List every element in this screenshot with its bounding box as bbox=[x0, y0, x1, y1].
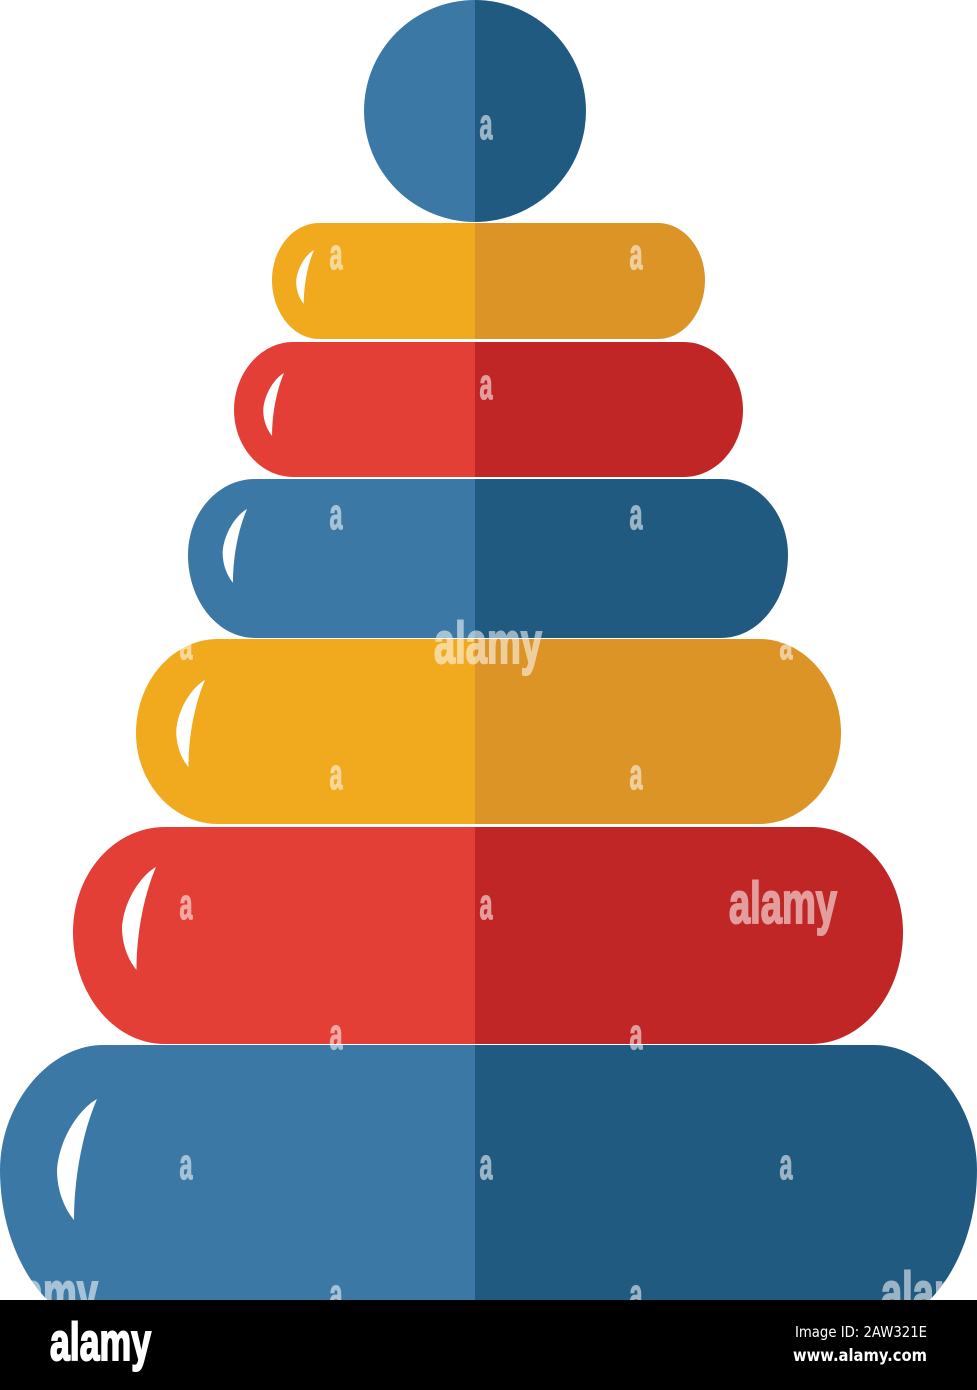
watermark letters: a bbox=[630, 230, 643, 279]
watermark letters: a bbox=[630, 490, 643, 539]
watermark letters: a bbox=[480, 880, 493, 929]
ring 4: yellow bbox=[136, 639, 841, 824]
watermark letters: a bbox=[330, 750, 343, 799]
watermark letters: a bbox=[180, 1140, 193, 1189]
watermark letters: a bbox=[180, 880, 193, 929]
watermark letters: a bbox=[630, 1010, 643, 1059]
watermark letters: a bbox=[630, 1270, 643, 1319]
watermark letters: a bbox=[180, 620, 193, 669]
watermark logos: alamy bbox=[434, 611, 542, 676]
ring 1: small yellow bbox=[272, 223, 705, 339]
ring 5: red bbox=[73, 827, 903, 1044]
base ring: large blue bbox=[0, 1045, 977, 1326]
watermark letters: a bbox=[330, 1010, 343, 1059]
ring 3: blue bbox=[188, 479, 788, 638]
watermark letters: a bbox=[330, 490, 343, 539]
watermark letters: a bbox=[480, 1140, 493, 1189]
watermark letters: a bbox=[630, 750, 643, 799]
watermark letters: a bbox=[780, 1140, 793, 1189]
footer logo: alamy bbox=[50, 1313, 151, 1372]
ball on top bbox=[364, 0, 586, 222]
image id: Image ID: 2AW321E bbox=[795, 1323, 927, 1341]
watermark letters: a bbox=[330, 1270, 343, 1319]
footer bar bbox=[0, 1300, 977, 1390]
watermark logos bbox=[0, 611, 977, 1326]
website: www.alamy.com bbox=[793, 1346, 927, 1365]
watermark logos: alamy bbox=[729, 871, 837, 936]
watermark letters: a bbox=[480, 360, 493, 409]
watermark letters: a bbox=[780, 620, 793, 669]
watermark letters: a bbox=[480, 100, 493, 149]
ring 2: red bbox=[234, 342, 743, 477]
watermark letters bbox=[180, 100, 793, 1319]
watermark letters: a bbox=[330, 230, 343, 279]
